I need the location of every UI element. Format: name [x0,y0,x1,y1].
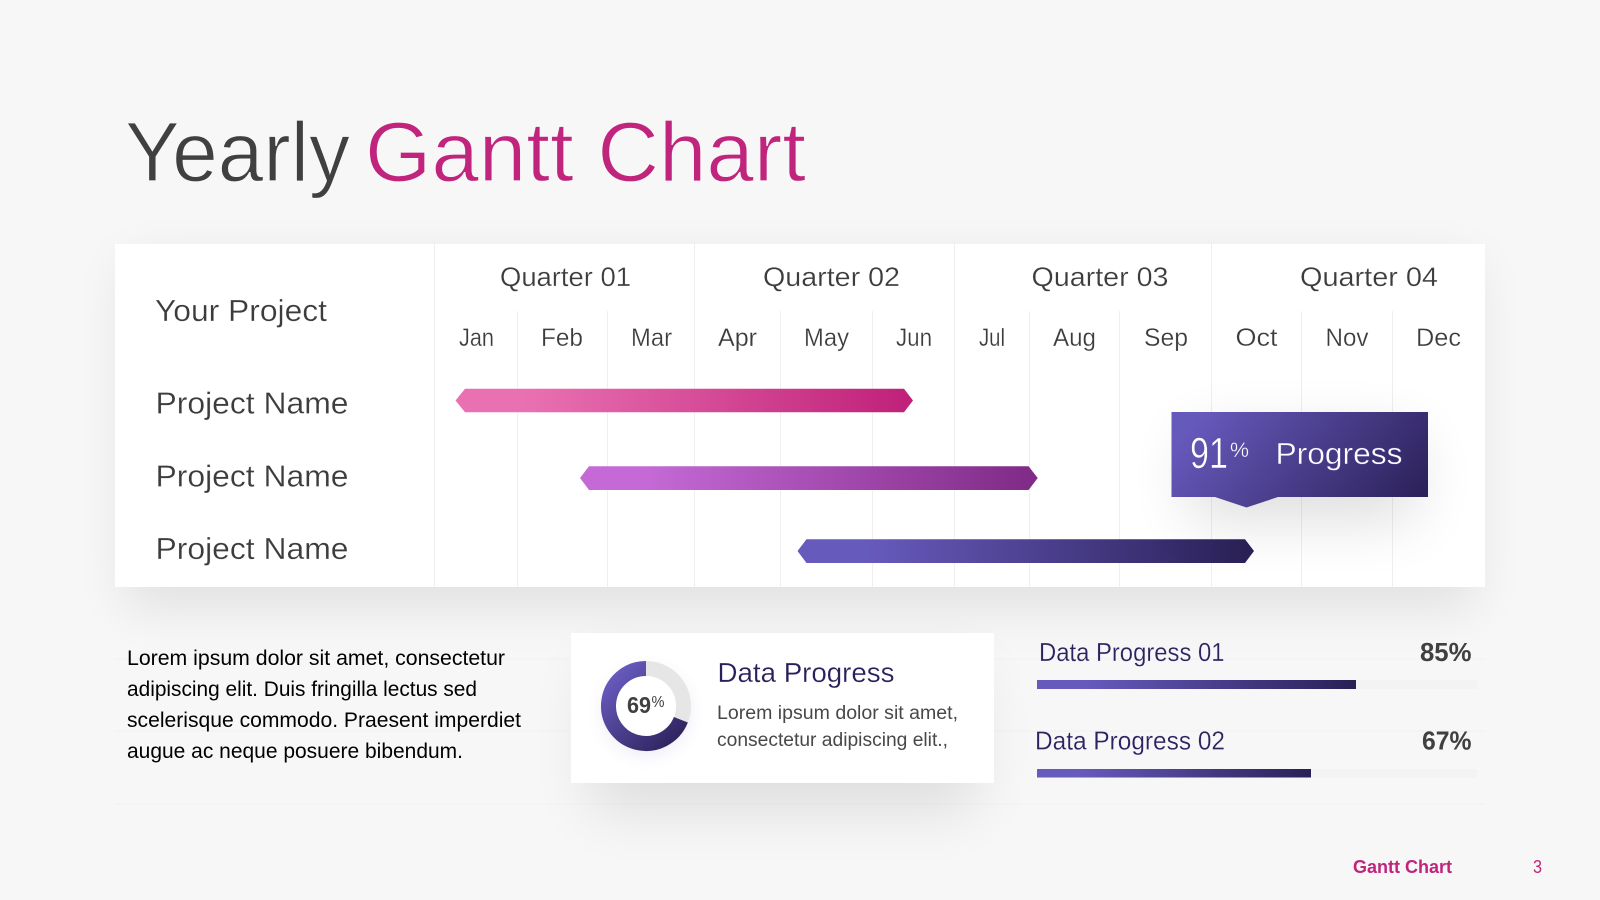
month headers: Apr [718,324,757,352]
donut chart: 69% [606,668,686,752]
callout: 91% progress: Progress [1276,436,1402,471]
month headers: Mar [631,324,672,352]
text block: description: adipiscing elit. Duis fringilla lectus sed [127,678,477,701]
donut chart: 69%: 69 [627,692,651,718]
gantt bar: project 3 [798,539,1254,563]
title: Gantt Chart [365,105,806,199]
progress: data progress 02 [1035,726,1477,778]
card text: Lorem ipsum dolor sit amet, [717,703,958,724]
panel: gantt chart [115,242,1485,607]
callout: 91% progress [1172,412,1428,520]
gantt bar: project 1 [456,389,913,412]
month headers: Oct [1236,324,1278,352]
month headers: Dec [1416,324,1461,352]
quarter headers: Quarter 01 [500,262,631,292]
callout: 91% progress: % [1230,439,1249,462]
project header: Your Project [155,293,327,328]
quarter headers: Quarter 02 [763,262,900,292]
progress: data progress 01: 85% [1420,637,1472,667]
progress: data progress 02: Data Progress 02 [1035,726,1225,756]
month headers: Nov [1326,324,1369,352]
text block: description: Lorem ipsum dolor sit amet, consectetur [127,647,505,670]
callout: 91% progress: 91 [1190,429,1228,478]
card text: consectetur adipiscing elit., [717,730,948,751]
month headers: Jun [896,324,932,352]
footer: section name: Gantt Chart [1353,857,1452,877]
title: Yearly [125,105,350,199]
text block: description: augue ac neque posuere bibendum. [127,740,463,763]
text block: description [127,647,521,763]
progress: data progress 02: 67% [1422,726,1472,756]
month headers [459,324,1461,352]
footer: page number: 3 [1533,857,1542,877]
month headers: Sep [1144,324,1188,352]
quarter headers: Quarter 03 [1032,262,1168,292]
month headers: Jan [459,324,494,352]
panel: data progress card [571,633,994,810]
quarter headers: Quarter 04 [1300,262,1438,292]
card text [717,703,958,751]
title [125,105,806,199]
quarter headers [500,262,1438,292]
progress: data progress 01 [1037,637,1477,689]
month headers: May [804,324,849,352]
donut chart: 69%: % [652,694,664,711]
project names [156,386,348,566]
month headers: Aug [1053,324,1096,352]
month headers: Feb [541,324,583,352]
progress: data progress 01: Data Progress 01 [1039,637,1224,667]
card heading: Data Progress [718,657,894,688]
project names: Project Name [156,386,348,420]
text block: description: scelerisque commodo. Praesent imperdiet [127,709,521,732]
gantt bar: project 2 [580,466,1038,490]
project names: Project Name [156,458,348,494]
project names: Project Name [156,531,348,566]
month headers: Jul [979,324,1005,352]
